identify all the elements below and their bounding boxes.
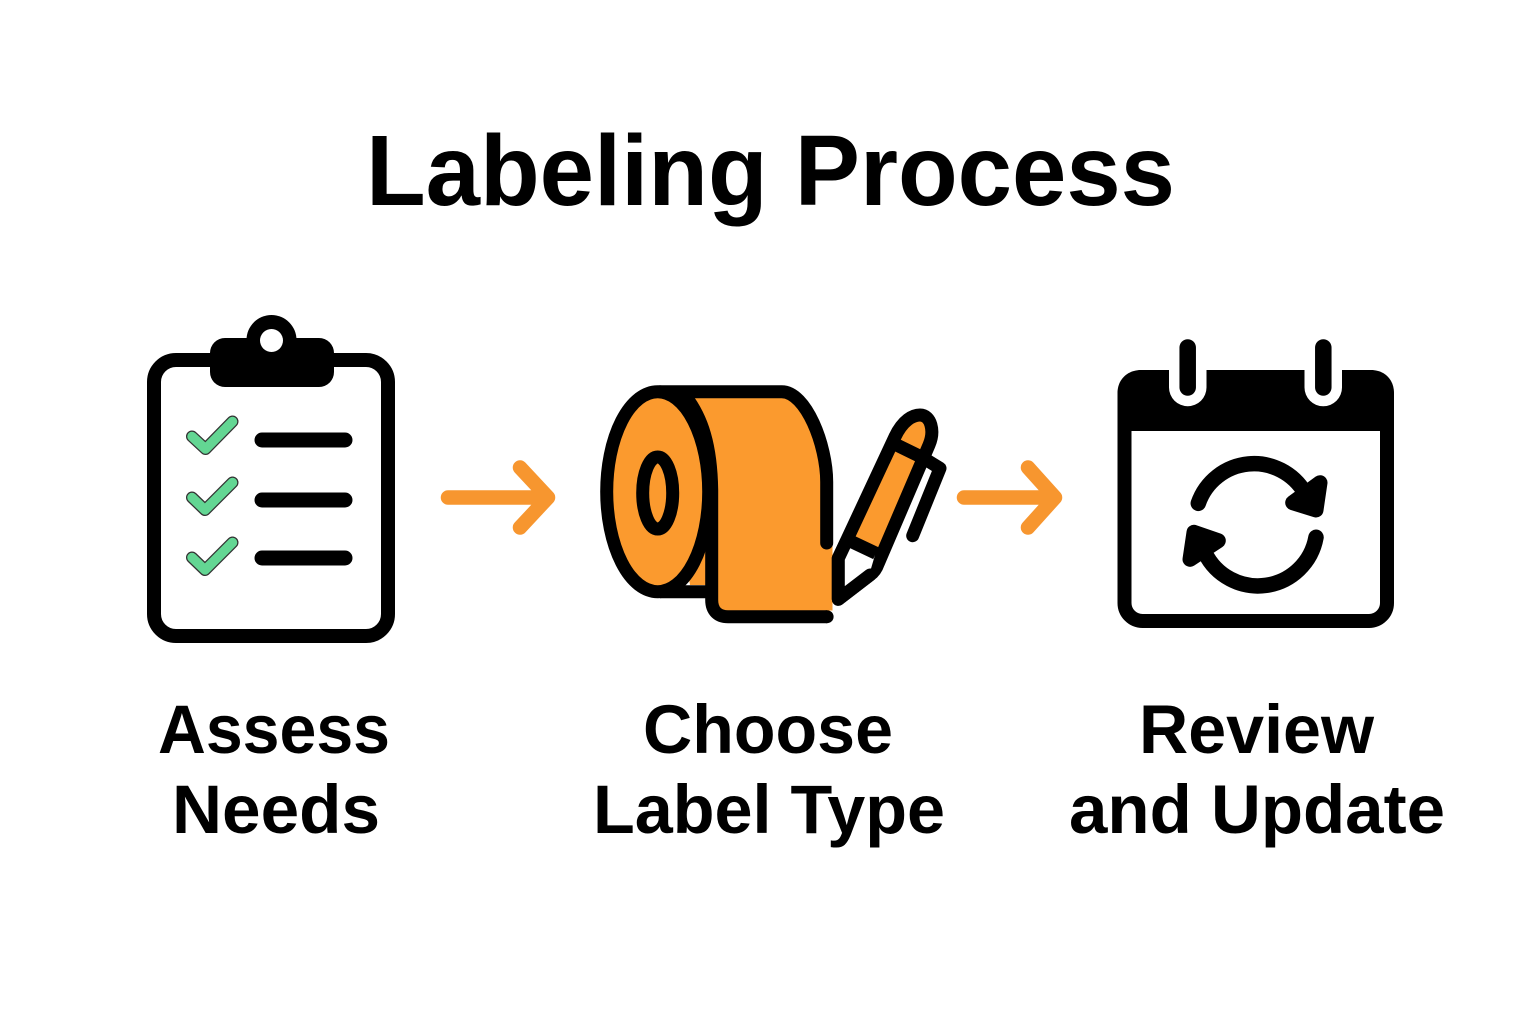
label: assess needs: Needs: [172, 771, 380, 848]
title: Labeling Process: [366, 115, 1175, 227]
arrow: step 2 to step 3: [964, 468, 1055, 528]
icon: label roll with pen: [607, 392, 940, 617]
label: review and update: Review: [1139, 691, 1374, 768]
panel: step 2 choose label type: [593, 392, 945, 848]
label: review and update: and Update: [1069, 771, 1445, 848]
icon: calendar with refresh arrows: [1118, 348, 1394, 621]
label: assess needs: [158, 691, 390, 848]
panel: step 3 review and update: [1069, 348, 1445, 848]
panel: step 1 assess needs: [154, 315, 390, 848]
label: choose label type: [593, 691, 945, 848]
label: choose label type: Label Type: [593, 771, 945, 848]
label: choose label type: Choose: [643, 691, 893, 768]
label: assess needs: Assess: [158, 691, 390, 768]
arrow: step 1 to step 2: [448, 468, 548, 528]
label: review and update: [1069, 691, 1445, 848]
icon: clipboard checklist: [154, 315, 388, 636]
